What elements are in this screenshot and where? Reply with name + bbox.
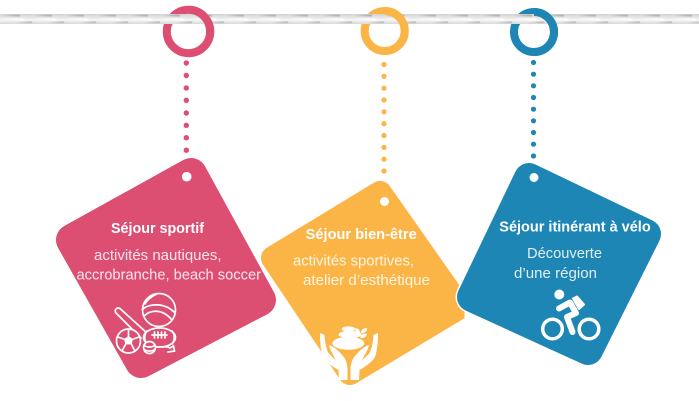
text: bien-être activities: atelier d’esthétique: [303, 272, 430, 289]
heading: sportif: Séjour sportif: [111, 221, 204, 237]
dotted string: orange: [381, 62, 387, 174]
panel: Séjour bien-être: [273, 193, 460, 380]
dotted string: blue: [531, 60, 536, 159]
text: sportif activities: [76, 247, 261, 284]
text: sportif activities: activités nautiques,: [94, 247, 222, 264]
heading: vélo: Séjour itinérant à vélo: [499, 220, 651, 236]
icon: sports balls and bat: [115, 294, 176, 354]
text: vélo description: Découverte: [527, 245, 602, 262]
text: vélo description: [514, 245, 602, 282]
text: sportif activities: accrobranche, beach soccer: [76, 266, 261, 284]
panel: Séjour itinérant à vélo: [472, 173, 651, 350]
dotted string: pink: [184, 60, 189, 153]
text: vélo description: d’une région: [514, 265, 597, 282]
icon: hands holding stones: [320, 326, 378, 380]
panel: Séjour sportif: [72, 172, 261, 362]
heading: bien-être: Séjour bien-être: [306, 227, 417, 243]
twisted rope: [0, 14, 699, 24]
ring fronts over the rope: [167, 10, 554, 53]
hanging rings behind the rope: [167, 10, 554, 53]
icon: cyclist: [543, 290, 599, 339]
text: bien-être activities: [293, 252, 430, 289]
text: bien-être activities: activités sportives,: [293, 252, 414, 270]
